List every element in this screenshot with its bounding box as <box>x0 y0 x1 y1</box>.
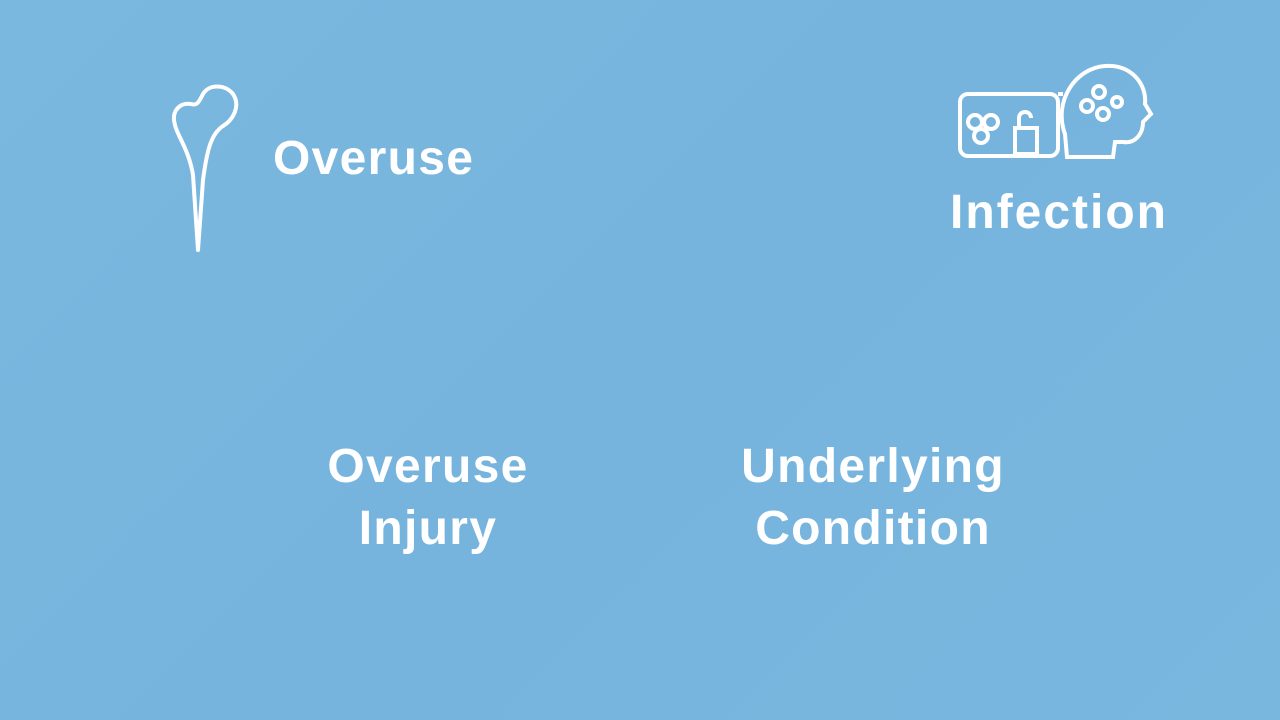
icon: femur bone <box>172 84 238 252</box>
text: Underlying Condition: Condition <box>755 502 991 555</box>
text: Underlying Condition: Underlying <box>741 440 1005 493</box>
text: Overuse Injury <box>327 440 529 555</box>
icon: infection head with gut <box>958 64 1154 159</box>
heading: Infection: Infection <box>950 186 1168 239</box>
text: Underlying Condition <box>741 440 1005 555</box>
text: Overuse Injury: Injury <box>359 502 497 555</box>
text: Overuse Injury: Overuse <box>327 440 529 493</box>
heading: Overuse: Overuse <box>273 132 474 185</box>
